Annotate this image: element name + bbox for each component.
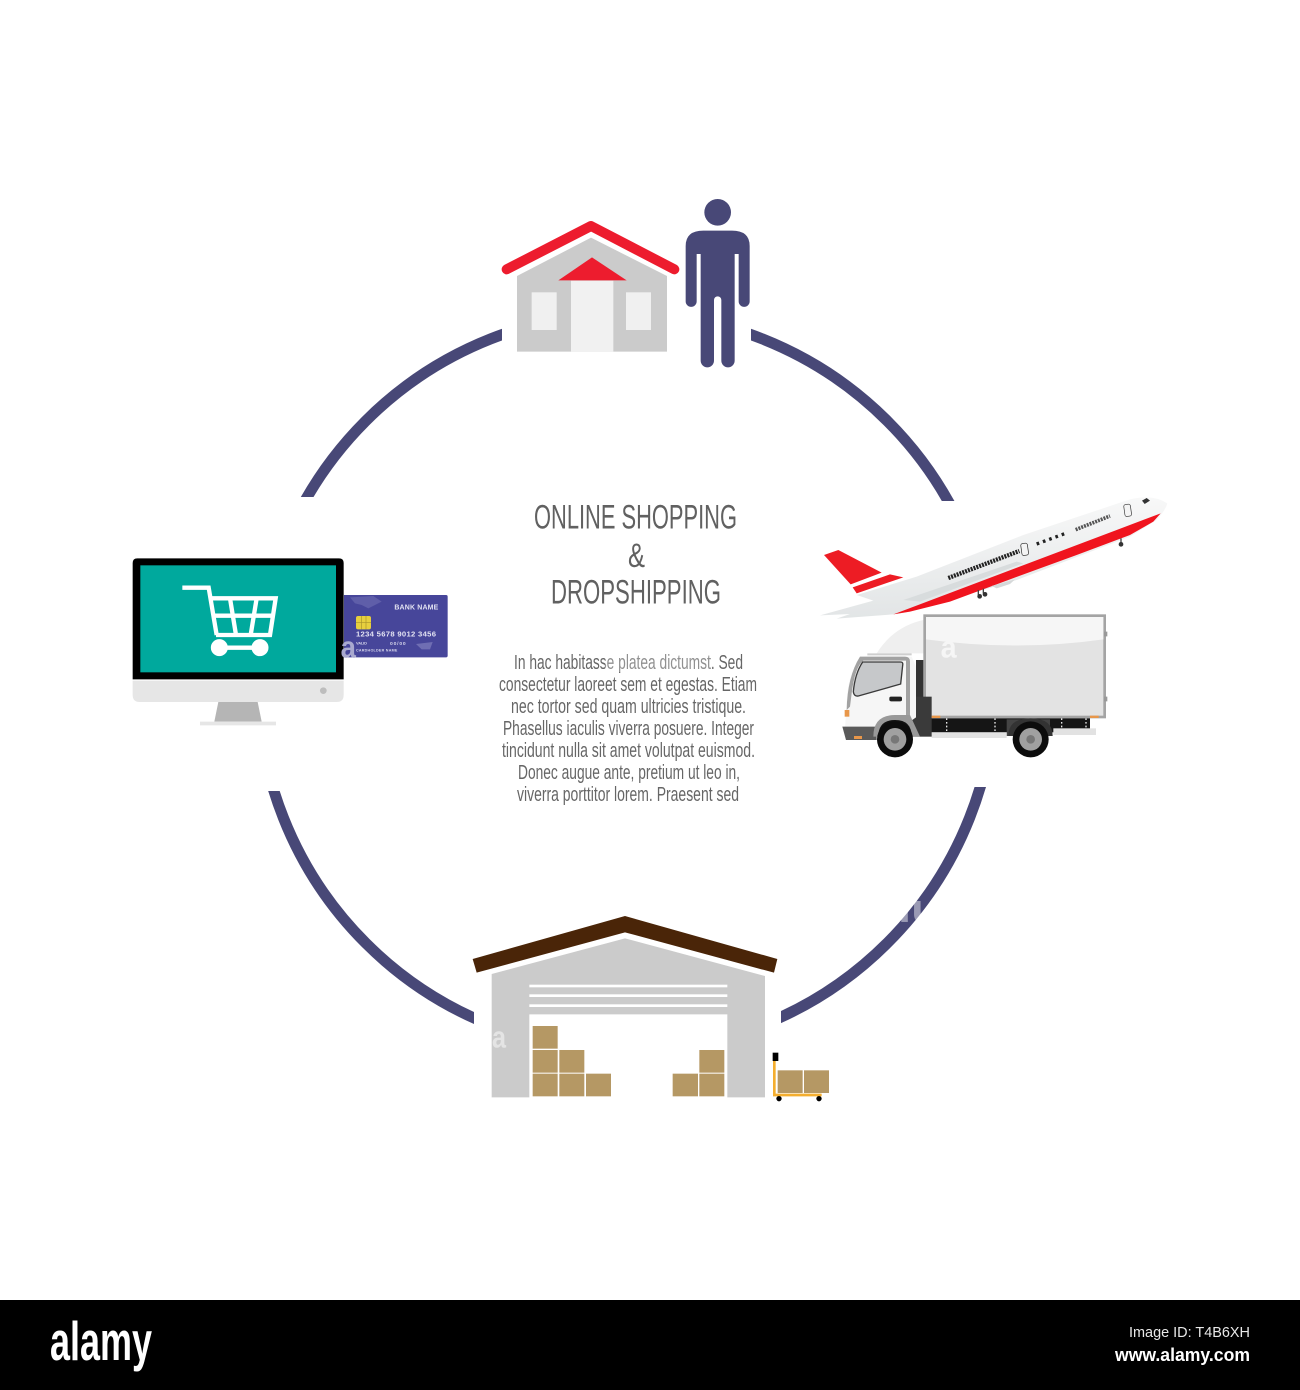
icon: credit card: CARDHOLDER NAME <box>356 648 398 652</box>
icon: airplane <box>820 497 1167 619</box>
icon: airplane and truck <box>820 497 1167 757</box>
icon: desktop monitor <box>133 558 344 725</box>
title: DROPSHIPPING <box>551 574 721 612</box>
shutter lines <box>529 985 727 1007</box>
footer url: www.alamy.com <box>1114 1345 1250 1365</box>
icon: credit card: BANK NAME <box>394 604 439 611</box>
footer bar <box>0 1300 1300 1390</box>
title <box>534 498 737 612</box>
faint watermark on ring: lu <box>898 887 940 931</box>
body text: viverra porttitor lorem. Praesent sed <box>517 783 739 806</box>
cycle ring <box>258 313 996 1051</box>
hand trolley with boxes <box>773 1053 829 1101</box>
watermark letter on warehouse: a <box>492 1021 507 1055</box>
body text: nec tortor sed quam ultricies tristique. <box>511 695 746 718</box>
body text: Phasellus iaculis viverra posuere. Integer <box>503 717 754 740</box>
watermark letter on truck: a <box>941 631 958 665</box>
icon: computer and credit card <box>133 558 448 725</box>
icon: credit card: VALID <box>356 641 367 646</box>
icon: house and person <box>507 199 750 367</box>
icon: warehouse <box>473 916 829 1101</box>
watermark letter on card: a <box>341 630 357 664</box>
body text <box>499 651 757 806</box>
footer image id: Image ID: T4B6XH <box>1129 1324 1250 1341</box>
warehouse building <box>492 938 765 1097</box>
warehouse roof <box>473 916 777 973</box>
icon: delivery truck <box>842 616 1107 757</box>
footer logo: alamy <box>50 1310 152 1372</box>
body text: In hac habitasse platea dictumst. Sed <box>514 651 743 674</box>
icon: person <box>686 199 750 367</box>
icon: credit card: 00/00 <box>390 641 406 647</box>
title: & <box>628 537 645 575</box>
stacked boxes <box>533 1026 724 1096</box>
title: ONLINE SHOPPING <box>534 498 737 536</box>
icon: house <box>507 226 674 352</box>
icon: credit card: 1234 5678 9012 3456 <box>356 630 436 639</box>
body text: consectetur laoreet sem et egestas. Etiam <box>499 673 757 696</box>
icon: credit card <box>344 595 448 657</box>
body text: Donec augue ante, pretium ut leo in, <box>518 761 740 784</box>
body text: tincidunt nulla sit amet volutpat euismod. <box>502 739 755 762</box>
icon: shopping cart <box>182 588 276 654</box>
